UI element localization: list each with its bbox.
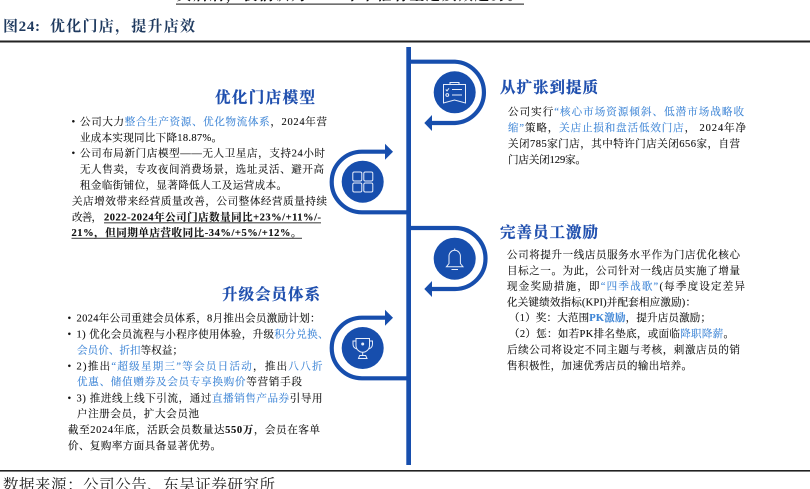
panel: membership: 截至2024年底，活跃会员数量达550万，会员在客单: [68, 423, 320, 436]
panel: store model: 2022-2024年公司门店数量同比+23%/+11%/-: [104, 210, 322, 224]
panel: store model: [72, 88, 328, 239]
panel: store model: 公司大力整合生产资源、优化物流体系，2024年营: [80, 115, 328, 128]
panel: membership: 2024年公司重建会员体系，8月推出会员激励计划：: [76, 312, 320, 324]
panel: store model: 租金临街铺位，显著降低人工及运营成本。: [80, 178, 287, 192]
panel: expansion to quality: 缩”策略，关店止损和盘活低效门店， 2024年净: [508, 121, 746, 134]
panel: staff incentives: （1）奖：大范围PK激励，提升店员激励；: [509, 311, 711, 324]
panel: expansion to quality: 门店关闭129家。: [508, 153, 586, 166]
panel: expansion to quality: [500, 78, 746, 166]
figure title: 图24:: [3, 18, 40, 35]
panel: staff incentives: 现金奖励措施，即“四季战歌”(每季度设定差异: [507, 280, 746, 292]
panel: expansion to quality: 公司实行“核心市场资源倾斜、低潜市场战略收: [508, 105, 744, 118]
connector: top right: [408, 62, 484, 131]
panel: membership: [68, 284, 328, 452]
panel: membership: 1) 优化会员流程与小程序使用体验，升级积分兑换、: [76, 328, 328, 340]
panel: staff incentives: （2）惩：如若PK排名垫底，或面临降职降薪。: [509, 327, 734, 340]
figure title: [3, 17, 195, 36]
panel: membership: 优惠、储值赠券及会员专享换购价等营销手段: [77, 375, 302, 388]
panel: membership: •: [68, 362, 72, 372]
icon: four squares grid: [342, 161, 384, 203]
panel: staff incentives: 化关键绩效指标(KPI)并配套相应激励)：: [507, 296, 696, 308]
icon: bell: [434, 238, 476, 280]
panel: membership: •: [68, 394, 72, 404]
panel: membership: •: [68, 314, 72, 324]
panel: staff incentives: 售积极性，加速优秀店员的输出培养。: [507, 359, 692, 372]
panel: membership: 2)推出“超级星期三”等会员日活动，推出八八折: [76, 360, 323, 372]
central timeline spine: [406, 47, 411, 465]
heading: store model: 优化门店模型: [215, 88, 315, 106]
connector: upper left: [332, 144, 408, 212]
panel: store model: 公司布局新门店模型——无人卫星店，支持24小时: [80, 146, 326, 160]
panel: membership: 户注册会员，扩大会员池: [77, 407, 200, 420]
panel: store model: 改善，: [72, 210, 102, 224]
panel: expansion to quality: 关闭785家门店，其中特许门店关闭656家，自营: [508, 137, 740, 150]
panel: store model: 业成本实现同比下降18.87%。: [80, 131, 222, 144]
figure title: 优化门店，提升店效: [50, 17, 195, 36]
panel: store model: 21%，但同期单店营收同比-34%/+5%/+12%。: [72, 226, 302, 239]
panel: staff incentives: [500, 224, 746, 372]
panel: membership: 会员价、折扣等权益；: [77, 344, 183, 356]
panel: staff incentives: 后续公司将设定不同主题与考核，刺激店员的销: [507, 343, 740, 356]
panel: store model: 无人售卖，专攻夜间消费场景，选址灵活、避开高: [80, 162, 324, 176]
panel: staff incentives: 公司将提升一线店员服务水平作为门店优化核心: [507, 248, 740, 261]
panel: store model: •: [72, 148, 76, 160]
panel: membership: 3) 推进线上线下引流，通过直播销售产品券引导用: [76, 392, 322, 404]
heading: expansion to quality: 从扩张到提质: [500, 78, 598, 96]
panel: membership: •: [68, 330, 72, 340]
panel: store model: 关店增效带来经营质量改善，公司整体经营质量持续: [72, 194, 328, 208]
panel: store model: •: [72, 117, 76, 128]
panel: staff incentives: 目标之一。为此，公司针对一线店员实施了增量: [507, 264, 740, 277]
icon: trophy: [342, 327, 384, 369]
connector: lower left: [332, 310, 408, 378]
heading: membership: 升级会员体系: [222, 284, 320, 304]
connector: lower right: [408, 228, 485, 297]
icon: clipboard checklist: [434, 71, 476, 113]
heading: staff incentives: 完善员工激励: [500, 224, 598, 242]
panel: membership: 价、复购率方面具备显著优势。: [68, 439, 221, 452]
